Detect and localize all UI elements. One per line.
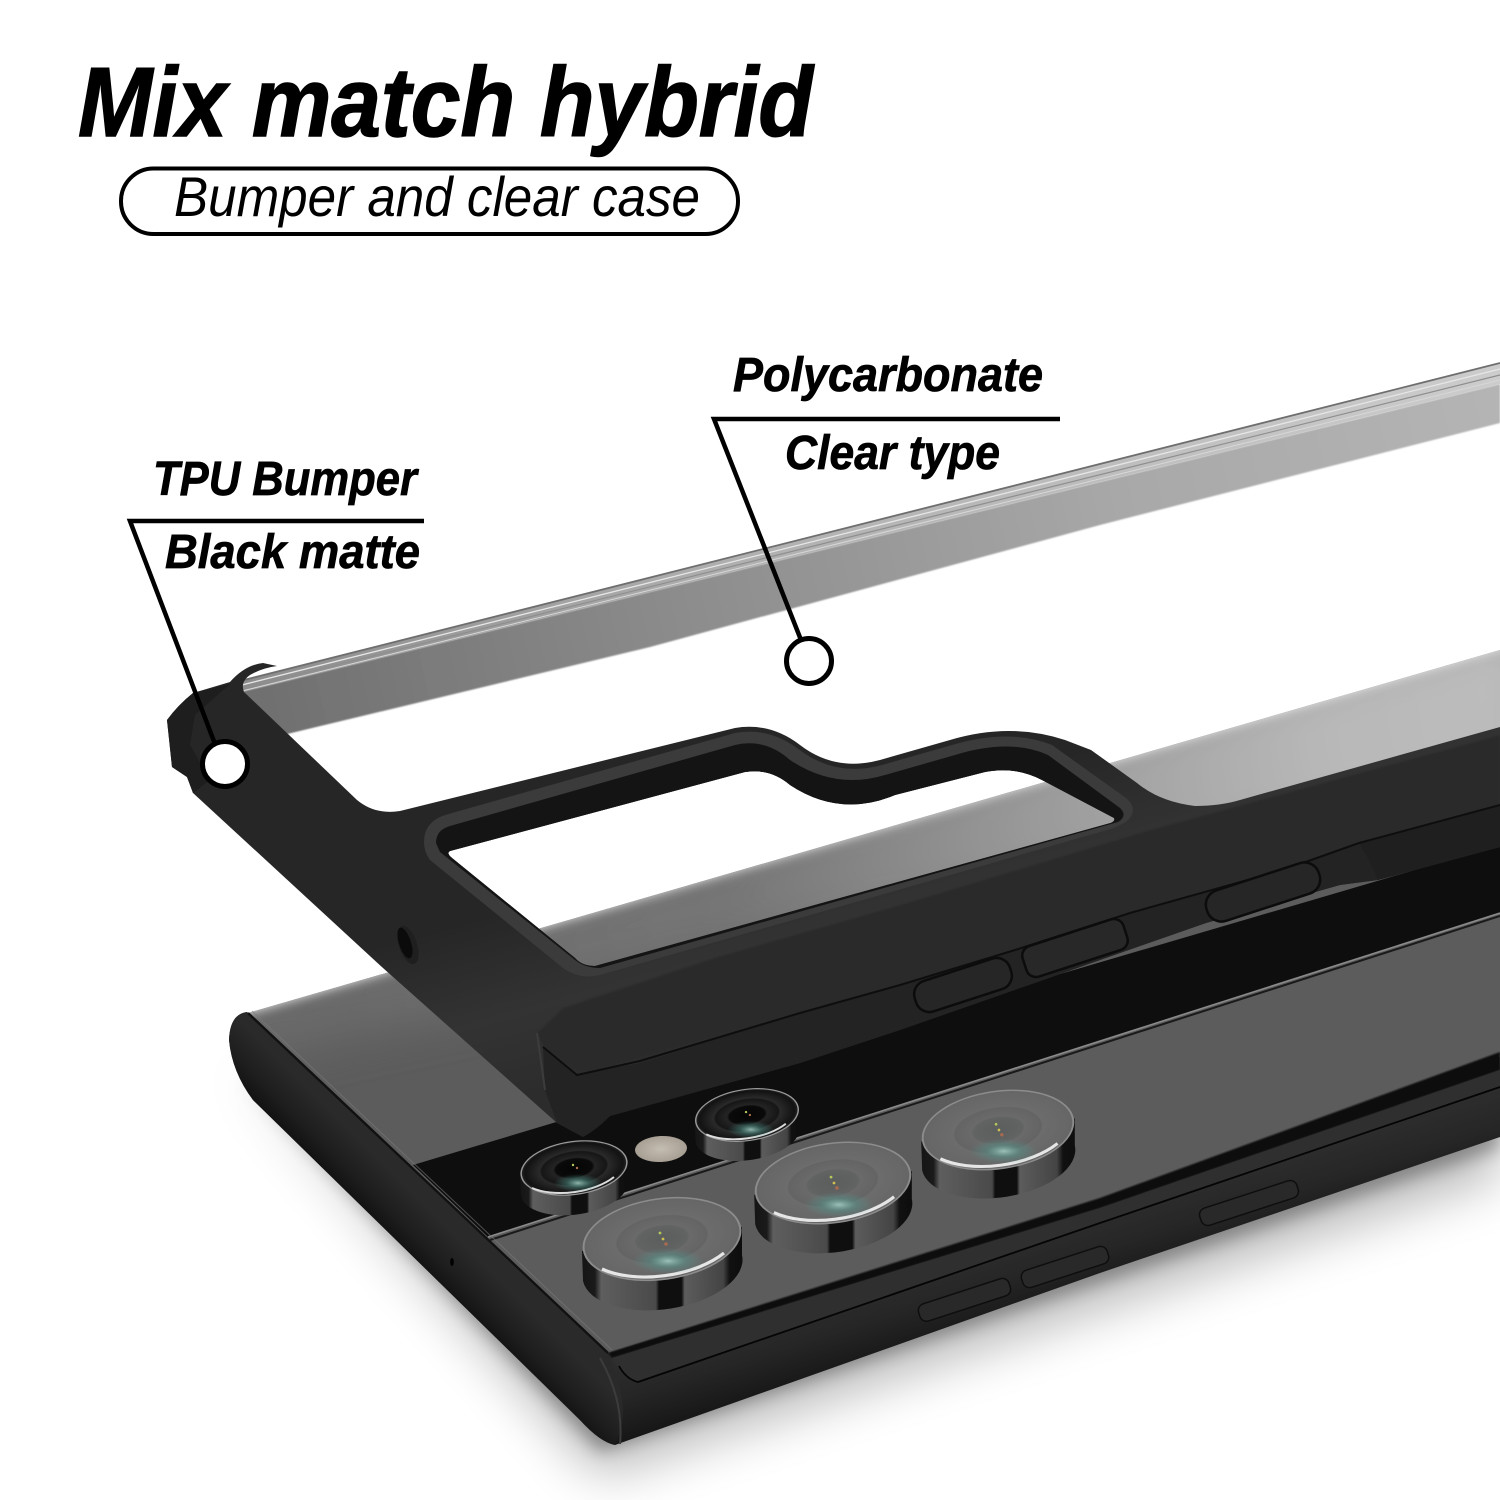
bumper side face (537, 735, 1500, 1072)
speaker hole (393, 923, 423, 967)
callout: TPU bumper: TPU Bumper (153, 453, 419, 506)
flash (634, 1135, 688, 1163)
bumper lower lip (543, 805, 1500, 1137)
lower panel band (612, 1070, 1500, 1382)
volume button lower (911, 954, 1015, 1016)
phone with camera lenses (229, 650, 1500, 1495)
right side recess (1359, 805, 1500, 880)
back lens right (691, 1082, 803, 1161)
callout: polycarbonate: Clear type (785, 427, 1000, 480)
crease line (543, 805, 1500, 1075)
bumper body (167, 663, 1500, 1137)
lip left crease (537, 1033, 545, 1090)
back lens left (517, 1134, 631, 1215)
title: Mix match hybrid (78, 47, 815, 157)
corner nub shading (167, 684, 230, 793)
lower groove (608, 1052, 1500, 1358)
black camera strip (413, 845, 1500, 1237)
callout: polycarbonate (714, 349, 1060, 684)
front lens middle (749, 1132, 917, 1253)
phone back glass (248, 650, 1500, 1353)
volume button upper (1020, 916, 1130, 980)
callout: polycarbonate: Polycarbonate (733, 349, 1043, 402)
power button (1202, 859, 1324, 925)
glass edge lines (248, 1013, 608, 1353)
callout: TPU bumper: Black matte (165, 526, 420, 579)
camera cutout raised ring (424, 732, 1133, 976)
camera cutout inner wall (436, 743, 1124, 968)
subtitle pill: Bumper and clear case (174, 165, 700, 228)
phone side buttons (917, 1179, 1300, 1323)
strip edge highlight (488, 913, 1500, 1237)
callout: TPU bumper (130, 453, 424, 786)
phone shadow (230, 1060, 1500, 1475)
phone corner curve (600, 1358, 621, 1444)
clear polycarbonate back band (232, 363, 1500, 735)
microphone hole (450, 1258, 454, 1266)
front lens large (577, 1187, 747, 1310)
front lens right (916, 1080, 1080, 1199)
phone side frame (229, 1012, 1500, 1445)
TPU bumper case (167, 663, 1500, 1137)
phone left side (229, 1012, 623, 1445)
